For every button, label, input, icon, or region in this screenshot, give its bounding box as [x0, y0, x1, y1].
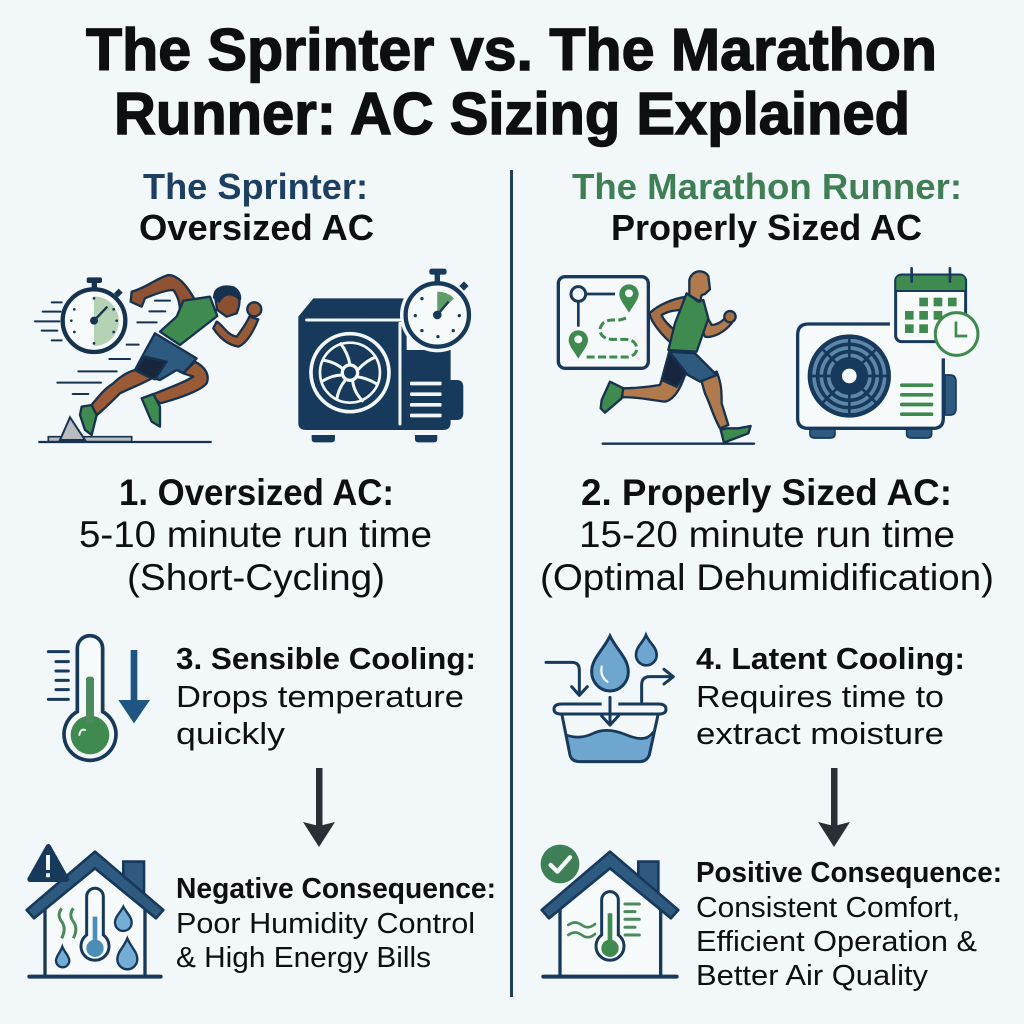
heading: the sprinter: The Sprinter: [143, 166, 368, 207]
heading: the marathon runner: Properly Sized AC [611, 207, 922, 248]
text: positive consequence: Positive Consequence: [696, 857, 1002, 889]
text: oversized AC run time: 5-10 minute run time [79, 514, 432, 555]
text: latent cooling: extract moisture [696, 716, 944, 751]
text: properly sized AC run time: 2. Properly Sized AC: [581, 472, 952, 513]
text: properly sized AC run time: (Optimal Dehumidification) [540, 557, 994, 598]
text: oversized AC run time: 1. Oversized AC: [119, 472, 394, 513]
text: sensible cooling: quickly [176, 716, 286, 751]
icon: house with humidity problem [27, 847, 163, 977]
heading: the marathon runner [572, 166, 962, 248]
icon: sprinter with stopwatch [35, 275, 261, 442]
stopwatch [63, 277, 125, 352]
icon: healthy house [541, 845, 678, 977]
text: positive consequence: Better Air Quality [696, 960, 929, 992]
text: negative consequence: Negative Consequence: [176, 873, 496, 905]
icon: properly sized AC unit with calendar [798, 268, 978, 438]
arrow: sensible to negative [303, 768, 335, 847]
text: latent cooling: 4. Latent Cooling: [696, 641, 965, 676]
fan [311, 334, 389, 412]
text: properly sized AC run time: 15-20 minute run time [579, 514, 955, 555]
starting block [38, 417, 212, 442]
icon: thermometer dropping [48, 636, 150, 760]
arrow: latent to positive [818, 768, 850, 847]
title [86, 17, 937, 147]
text: negative consequence [176, 873, 496, 974]
title: The Sprinter vs. The Marathon [86, 17, 937, 83]
icon: water collecting in a pan [546, 635, 673, 762]
text: positive consequence [696, 857, 1002, 992]
icon: marathon runner [601, 271, 754, 444]
text: sensible cooling: Drops temperature [176, 679, 464, 714]
icon: oversized AC unit with stopwatch [298, 269, 475, 442]
runner figure [80, 275, 261, 435]
text: negative consequence: & High Energy Bills [176, 942, 431, 974]
icon: route map [558, 277, 648, 368]
fan grille [808, 334, 891, 418]
text: positive consequence: Efficient Operation & [696, 926, 977, 958]
text: oversized AC run time [79, 472, 432, 598]
text: sensible cooling [176, 641, 476, 751]
calendar [896, 275, 966, 342]
text: properly sized AC run time [540, 472, 994, 598]
heading: the sprinter [139, 166, 374, 248]
text: negative consequence: Poor Humidity Control [176, 908, 475, 940]
text: sensible cooling: 3. Sensible Cooling: [176, 641, 476, 676]
ac stopwatch [400, 278, 475, 352]
text: latent cooling [696, 641, 965, 751]
heading: the marathon runner: The Marathon Runner: [572, 166, 962, 207]
heading: the sprinter: Oversized AC [139, 207, 374, 248]
text: oversized AC run time: (Short-Cycling) [127, 557, 385, 598]
speed lines [35, 301, 170, 394]
text: latent cooling: Requires time to [696, 679, 944, 714]
text: positive consequence: Consistent Comfort, [696, 892, 960, 924]
title: Runner: AC Sizing Explained [114, 81, 910, 147]
